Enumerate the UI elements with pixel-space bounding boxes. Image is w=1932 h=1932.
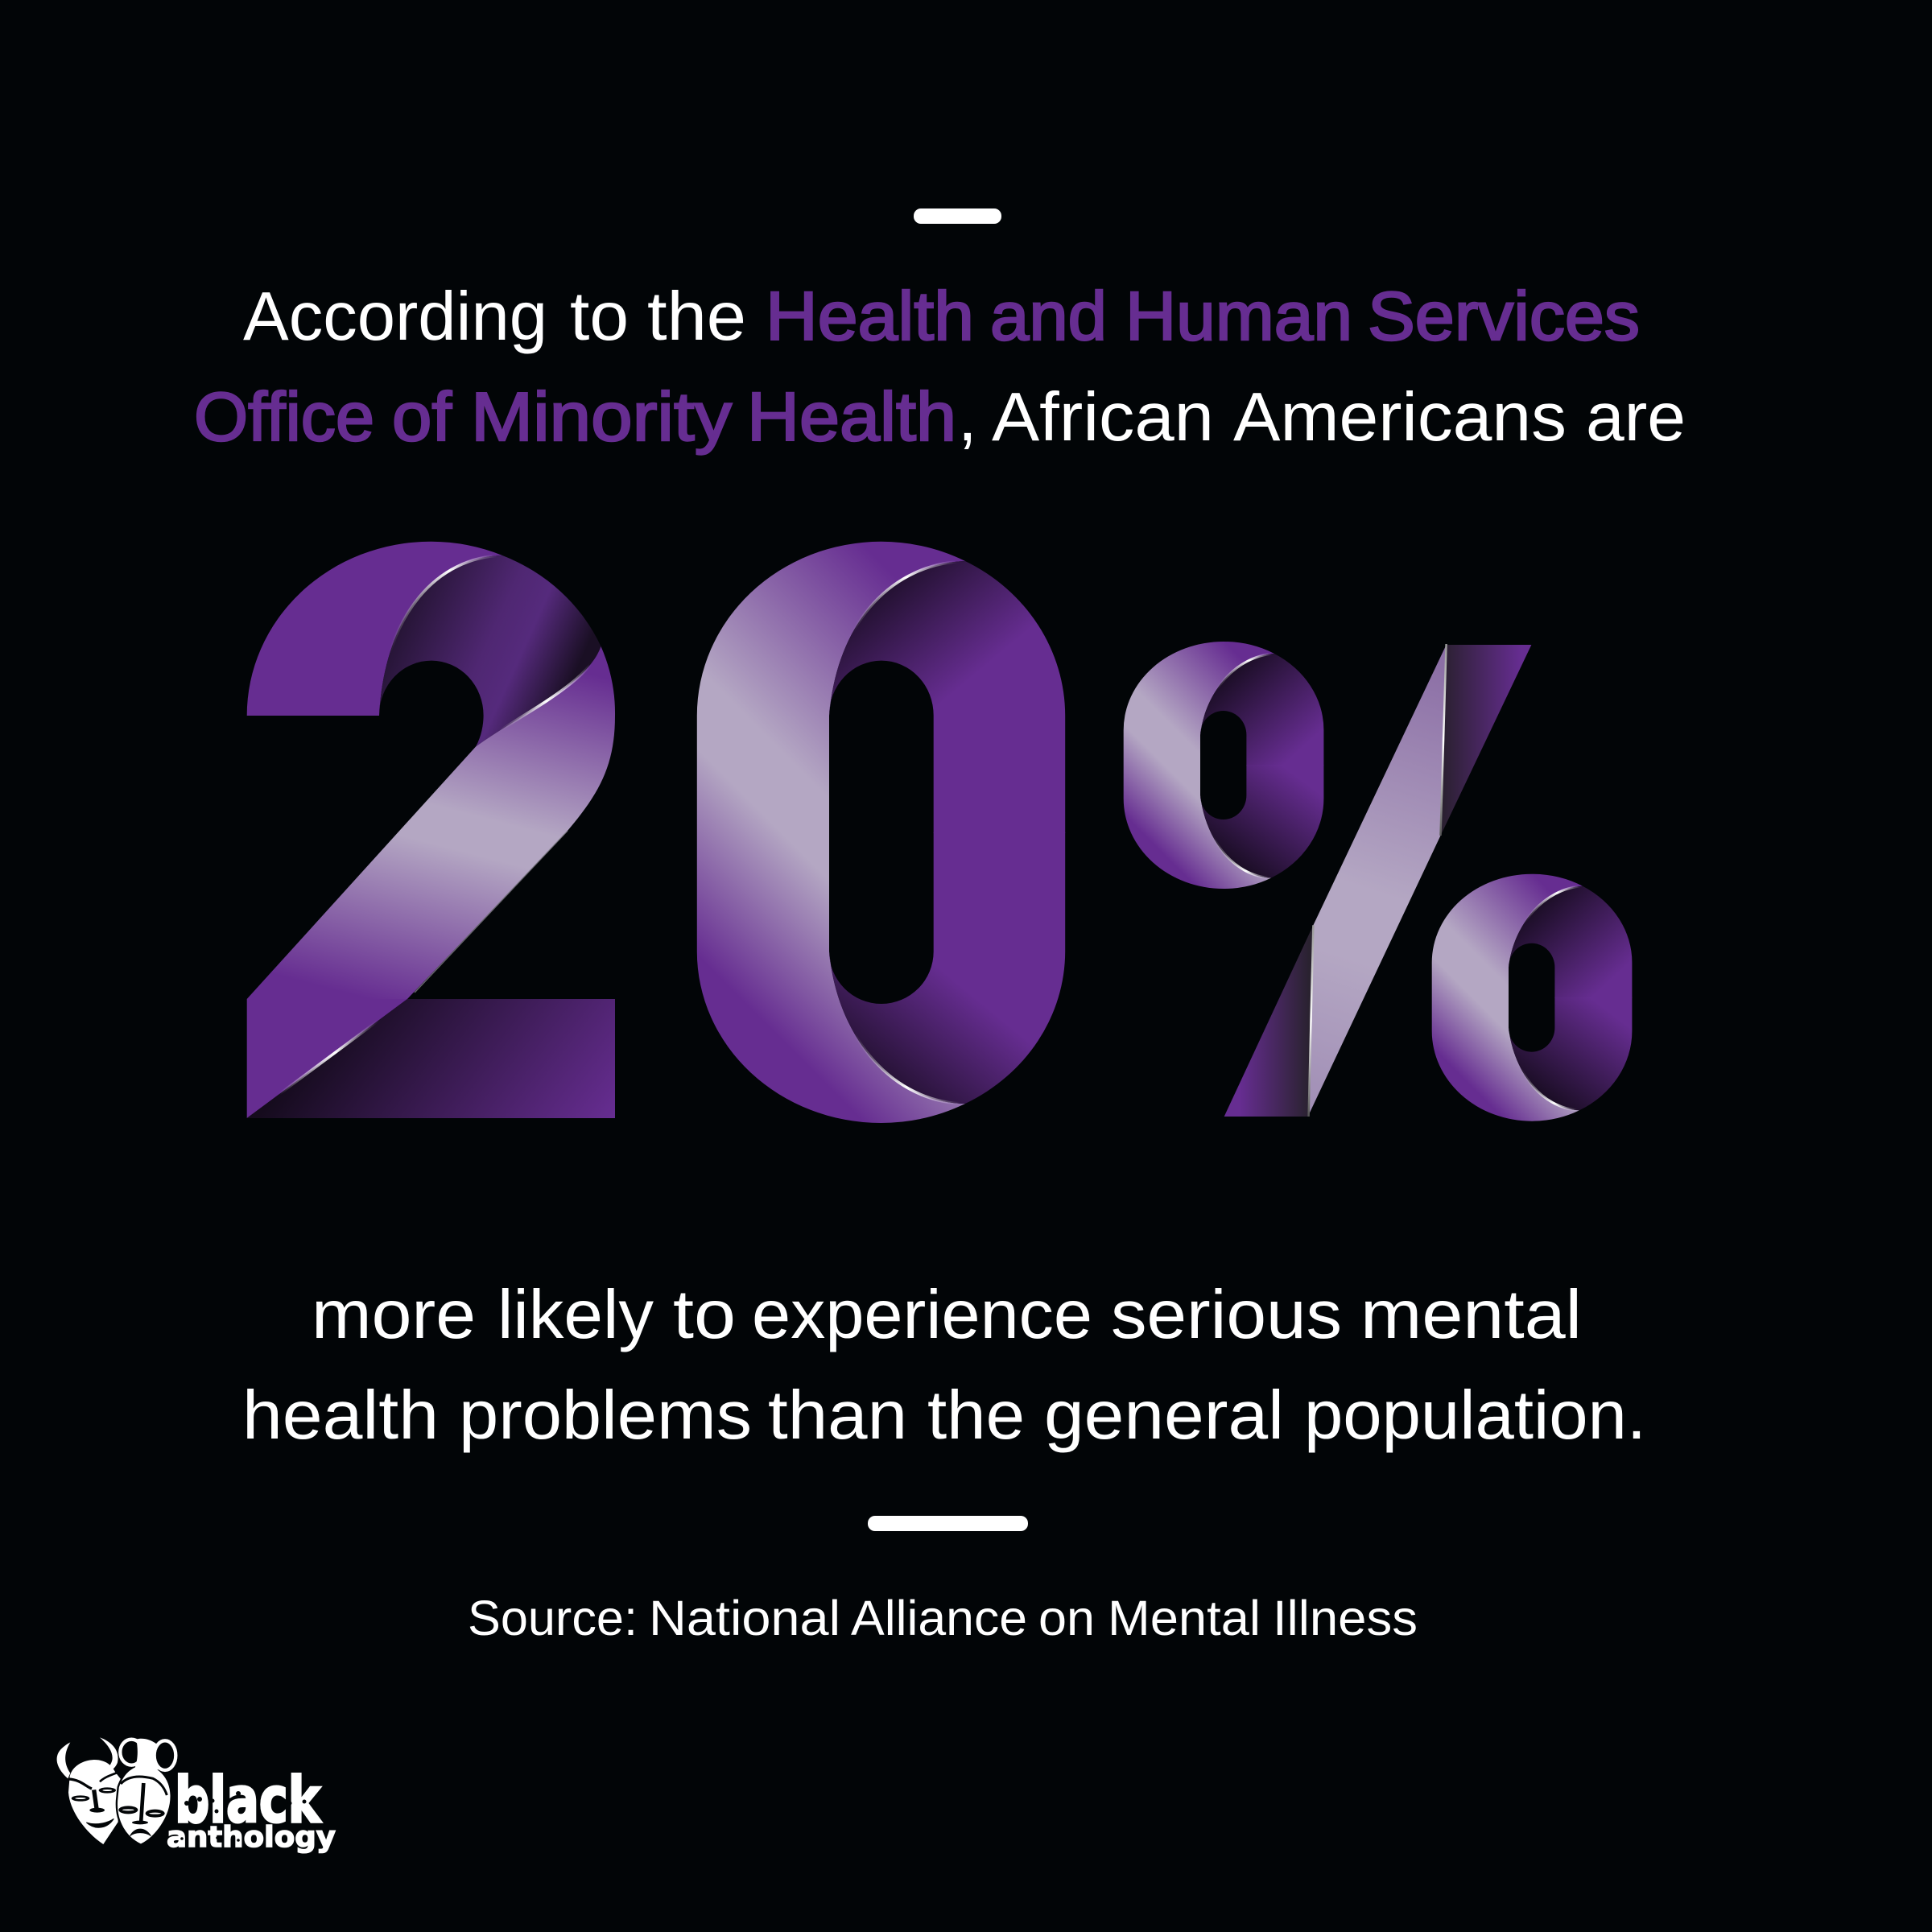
conclusion text: than xyxy=(768,1377,907,1454)
conclusion text: problems xyxy=(459,1377,752,1454)
conclusion text xyxy=(242,1277,1646,1454)
intro text: and xyxy=(990,279,1107,355)
intro text: , xyxy=(958,379,977,456)
big number: 20% xyxy=(247,542,1632,1123)
intro text: of xyxy=(392,379,452,456)
logo: black anthology xyxy=(57,1737,336,1854)
source line: Source: xyxy=(468,1591,638,1645)
conclusion text: population. xyxy=(1304,1377,1646,1454)
intro text: African xyxy=(992,379,1214,456)
bottom divider bar xyxy=(868,1516,1028,1531)
conclusion text: to xyxy=(673,1277,736,1353)
intro text: Services xyxy=(1368,279,1640,355)
source line: National xyxy=(649,1591,840,1645)
intro text: Minority xyxy=(471,379,733,456)
top divider bar xyxy=(914,208,1001,224)
percent slash xyxy=(1224,644,1531,1117)
intro text: are xyxy=(1586,379,1686,456)
wordmark xyxy=(167,1765,336,1854)
intro text: Health xyxy=(747,379,956,456)
source line: Illness xyxy=(1273,1591,1418,1645)
intro text: Health xyxy=(766,279,974,355)
wordmark: anthology xyxy=(167,1821,336,1854)
conclusion text: mental xyxy=(1360,1277,1582,1353)
conclusion text: serious xyxy=(1111,1277,1342,1353)
icon: theatre masks xyxy=(57,1737,175,1845)
percent upper circle xyxy=(1124,642,1323,889)
conclusion text: health xyxy=(242,1377,439,1454)
percent lower circle xyxy=(1432,874,1632,1121)
wordmark: black xyxy=(175,1765,322,1837)
percent sign xyxy=(1124,642,1632,1121)
intro text: Americans xyxy=(1233,379,1567,456)
intro text: to xyxy=(570,279,629,355)
intro text: the xyxy=(647,279,746,355)
conclusion text: the xyxy=(927,1377,1025,1454)
conclusion text: more xyxy=(312,1277,476,1353)
digit 2 xyxy=(247,542,615,1118)
conclusion text: general xyxy=(1044,1377,1284,1454)
intro text: According xyxy=(243,279,547,355)
conclusion text: experience xyxy=(752,1277,1092,1353)
source line: on xyxy=(1038,1591,1095,1645)
source line: Alliance xyxy=(851,1591,1027,1645)
conclusion text: likely xyxy=(497,1277,654,1353)
intro text xyxy=(194,279,1686,456)
intro text: Office xyxy=(194,379,374,456)
digit 0 xyxy=(697,542,1065,1123)
source line: Mental xyxy=(1108,1591,1261,1645)
intro text: Human xyxy=(1125,279,1352,355)
source line xyxy=(468,1591,1418,1645)
